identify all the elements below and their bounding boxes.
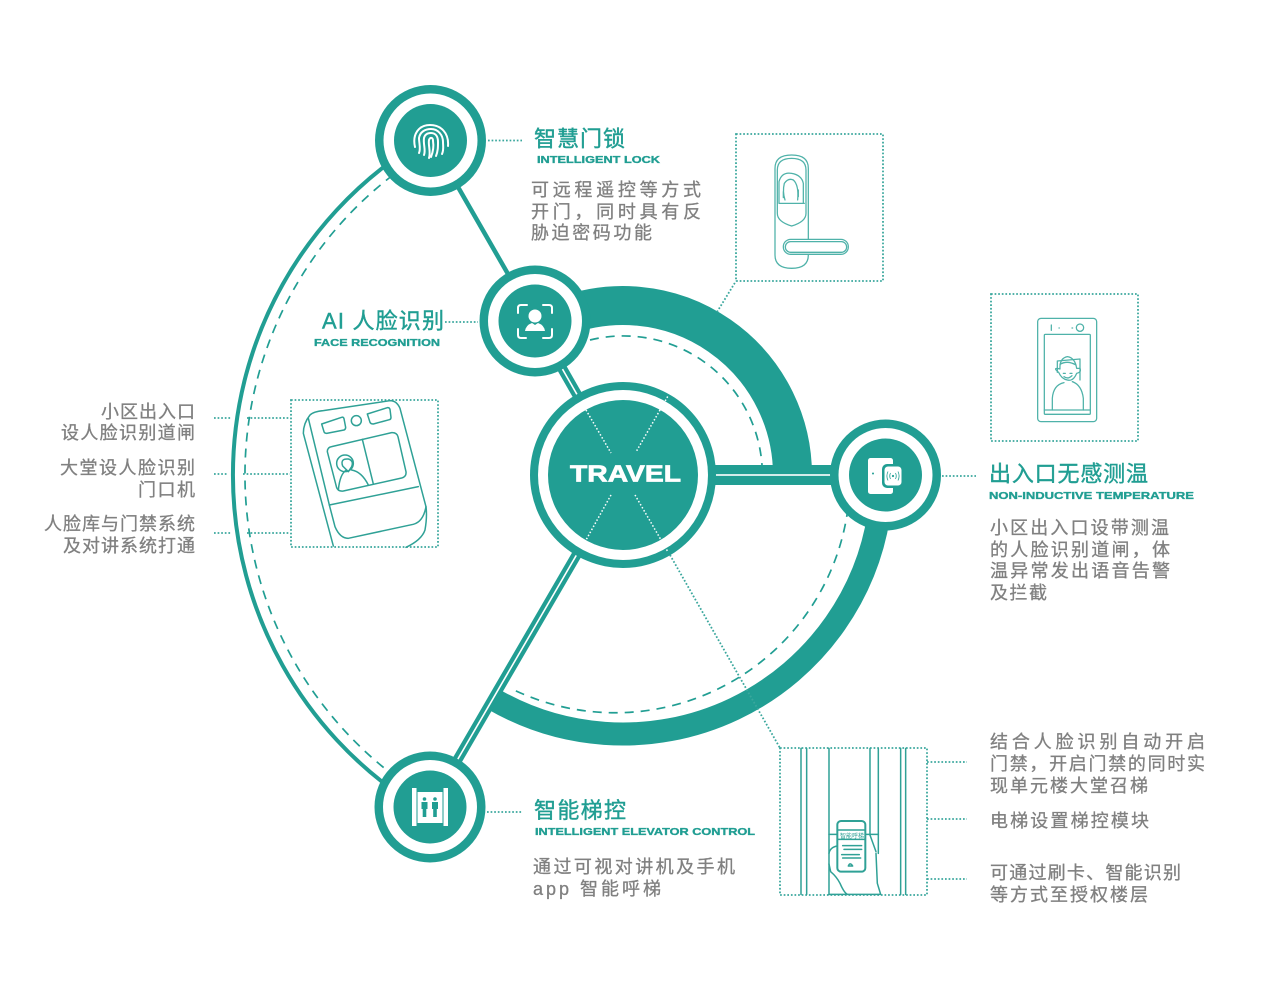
panel: smart lock illustration — [736, 134, 883, 281]
text: face recognition captions — [44, 402, 195, 556]
heading: face recognition: AI 人脸识别 — [322, 308, 444, 334]
text: elevator captions: 电梯设置梯控模块 — [990, 811, 1149, 831]
text: smart lock description: 可远程遥控等方式 — [531, 180, 701, 200]
heading: temperature — [989, 462, 1194, 502]
dotted leader: center to elevator image — [670, 555, 780, 748]
node: temperature — [830, 420, 941, 530]
icon: elevator — [412, 788, 448, 826]
text: face recognition captions: 小区出入口 — [101, 402, 195, 422]
icon: door with sensor — [868, 458, 904, 494]
text: temperature description: 温异常发出语音告警 — [990, 561, 1170, 581]
heading: elevator control: INTELLIGENT ELEVATOR CONTROL — [535, 826, 756, 838]
text: smart lock description: 开门，同时具有反 — [531, 202, 701, 222]
heading: smart lock: INTELLIGENT LOCK — [537, 154, 660, 166]
text: elevator captions — [990, 732, 1205, 905]
text: elevator captions: 结合人脸识别自动开启 — [990, 732, 1205, 752]
dotted leader: center to lock image — [717, 281, 736, 312]
text: elevator captions: 可通过刷卡、智能识别 — [990, 863, 1181, 883]
text: elevator captions: 门禁，开启门禁的同时实 — [990, 754, 1205, 774]
text: elevator description: app 智能呼梯 — [533, 879, 661, 899]
heading: elevator control: 智能梯控 — [534, 798, 626, 823]
structure: arcs and spokes — [233, 140, 879, 807]
text: temperature description: 的人脸识别道闸，体 — [990, 540, 1170, 560]
heading: smart lock — [534, 126, 660, 166]
panel: face terminal illustration — [291, 400, 438, 547]
center circle: TRAVEL: TRAVEL — [570, 460, 681, 486]
text: temperature description: 及拦截 — [990, 583, 1047, 603]
node: elevator — [374, 752, 486, 862]
panel: elevator phone illustration — [780, 748, 927, 895]
text: elevator description: 通过可视对讲机及手机 — [533, 857, 735, 877]
heading: elevator control — [534, 798, 756, 838]
text: face recognition captions: 及对讲系统打通 — [63, 536, 195, 556]
text: face recognition captions: 大堂设人脸识别 — [60, 458, 195, 478]
center circle: TRAVEL — [530, 382, 716, 568]
text: temperature description — [990, 518, 1170, 603]
node: smart lock — [375, 85, 486, 196]
text: elevator captions: 等方式至授权楼层 — [990, 885, 1148, 905]
text: elevator captions: 现单元楼大堂召梯 — [990, 776, 1148, 796]
text: face recognition captions: 设人脸识别道闸 — [61, 423, 195, 443]
panel: temperature terminal illustration — [991, 294, 1138, 441]
phone screen title: 智能呼梯 — [840, 832, 864, 840]
heading: face recognition — [314, 308, 444, 349]
dotted leaders: elevator captions — [927, 762, 967, 879]
heading: face recognition: FACE RECOGNITION — [314, 337, 440, 349]
text: face recognition captions: 门口机 — [138, 480, 195, 500]
text: elevator description — [533, 857, 735, 899]
icon: fingerprint — [414, 125, 448, 158]
text: smart lock description — [531, 180, 701, 243]
dotted leaders: left captions — [214, 418, 290, 533]
text: temperature description: 小区出入口设带测温 — [990, 518, 1169, 538]
icon: face scan — [518, 305, 552, 338]
text: face recognition captions: 人脸库与门禁系统 — [44, 514, 195, 534]
dotted leaders: nodes to labels — [445, 140, 976, 812]
heading: smart lock: 智慧门锁 — [534, 126, 625, 152]
heading: temperature: 出入口无感测温 — [989, 462, 1148, 486]
heading: temperature: NON-INDUCTIVE TEMPERATURE — [989, 490, 1194, 502]
text: smart lock description: 胁迫密码功能 — [531, 223, 652, 243]
node: face recognition — [480, 266, 590, 376]
